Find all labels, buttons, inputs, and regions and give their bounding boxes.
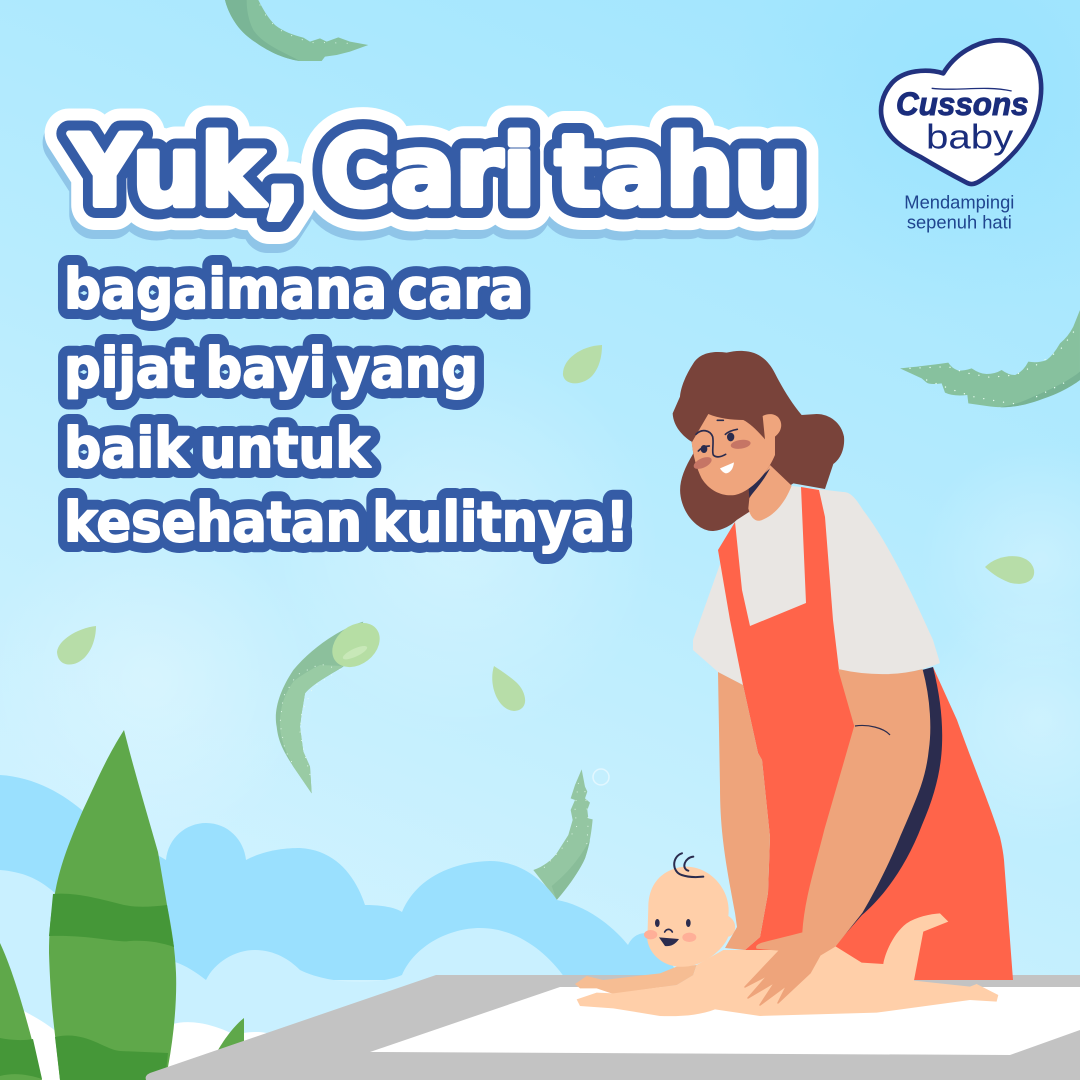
aloe slice: top bbox=[225, 0, 368, 61]
subtitle line 1: bagaimana cara bbox=[64, 257, 524, 321]
light ring sparkle bbox=[593, 769, 609, 785]
baby head bbox=[647, 867, 735, 967]
subtitle line 1: bagaimana cara bbox=[64, 257, 524, 321]
table bbox=[146, 975, 1080, 1080]
baby hair curl bbox=[674, 853, 703, 877]
aloe slice: middle bbox=[276, 614, 388, 793]
hair, face and neck bbox=[673, 351, 844, 531]
subtitle bbox=[64, 257, 629, 554]
logo heart bbox=[881, 40, 1041, 184]
title: Yuk, Cari tahu bbox=[69, 115, 802, 229]
logo baby: baby bbox=[926, 118, 1014, 156]
dark underlayer bbox=[830, 667, 942, 946]
baby bbox=[575, 853, 998, 1016]
plant: small leaf tip bbox=[218, 1018, 244, 1050]
aloe drop: left bbox=[57, 626, 96, 665]
plant: small left leaf bbox=[0, 943, 42, 1080]
subtitle line 3: baik untuk bbox=[64, 416, 371, 480]
aloe slice: right bbox=[900, 310, 1080, 407]
back arm bbox=[718, 672, 770, 950]
subtitle line 2: pijat bayi yang bbox=[64, 336, 478, 400]
logo swoosh bbox=[932, 88, 1012, 91]
plant: large leaf bbox=[49, 730, 176, 1080]
logo bbox=[881, 40, 1041, 232]
aloe drop: centre bbox=[492, 666, 525, 711]
baby face bbox=[644, 919, 696, 946]
logo: sepenuh hati bbox=[907, 211, 1012, 232]
title: Yuk, Cari tahu bbox=[69, 115, 802, 229]
baby back arm bbox=[575, 965, 697, 994]
title: Yuk, Cari tahu bbox=[67, 124, 800, 238]
front arm and hand bbox=[745, 670, 930, 1005]
subtitle line 4: kesehatan kulitnya! bbox=[64, 490, 629, 554]
subtitle line 2: pijat bayi yang bbox=[64, 336, 478, 400]
elbow crease bbox=[855, 725, 890, 735]
logo tagline: Mendampingi bbox=[904, 191, 1014, 212]
subtitle line 3: baik untuk bbox=[64, 416, 371, 480]
apron bbox=[718, 487, 1013, 980]
clouds bbox=[0, 775, 680, 1080]
title: Yuk, Cari tahu bbox=[69, 115, 802, 229]
logo wordmark: Cussons bbox=[896, 86, 1029, 122]
aloe slice: lower bbox=[533, 769, 593, 900]
aloe drop: right bbox=[985, 556, 1034, 584]
subtitle line 4: kesehatan kulitnya! bbox=[64, 490, 629, 554]
woman: upper body bbox=[673, 351, 1013, 980]
shirt bbox=[693, 486, 940, 685]
woman: arms bbox=[718, 667, 942, 1005]
aloe drop: centre top bbox=[563, 345, 602, 383]
baby body bbox=[577, 913, 998, 1016]
